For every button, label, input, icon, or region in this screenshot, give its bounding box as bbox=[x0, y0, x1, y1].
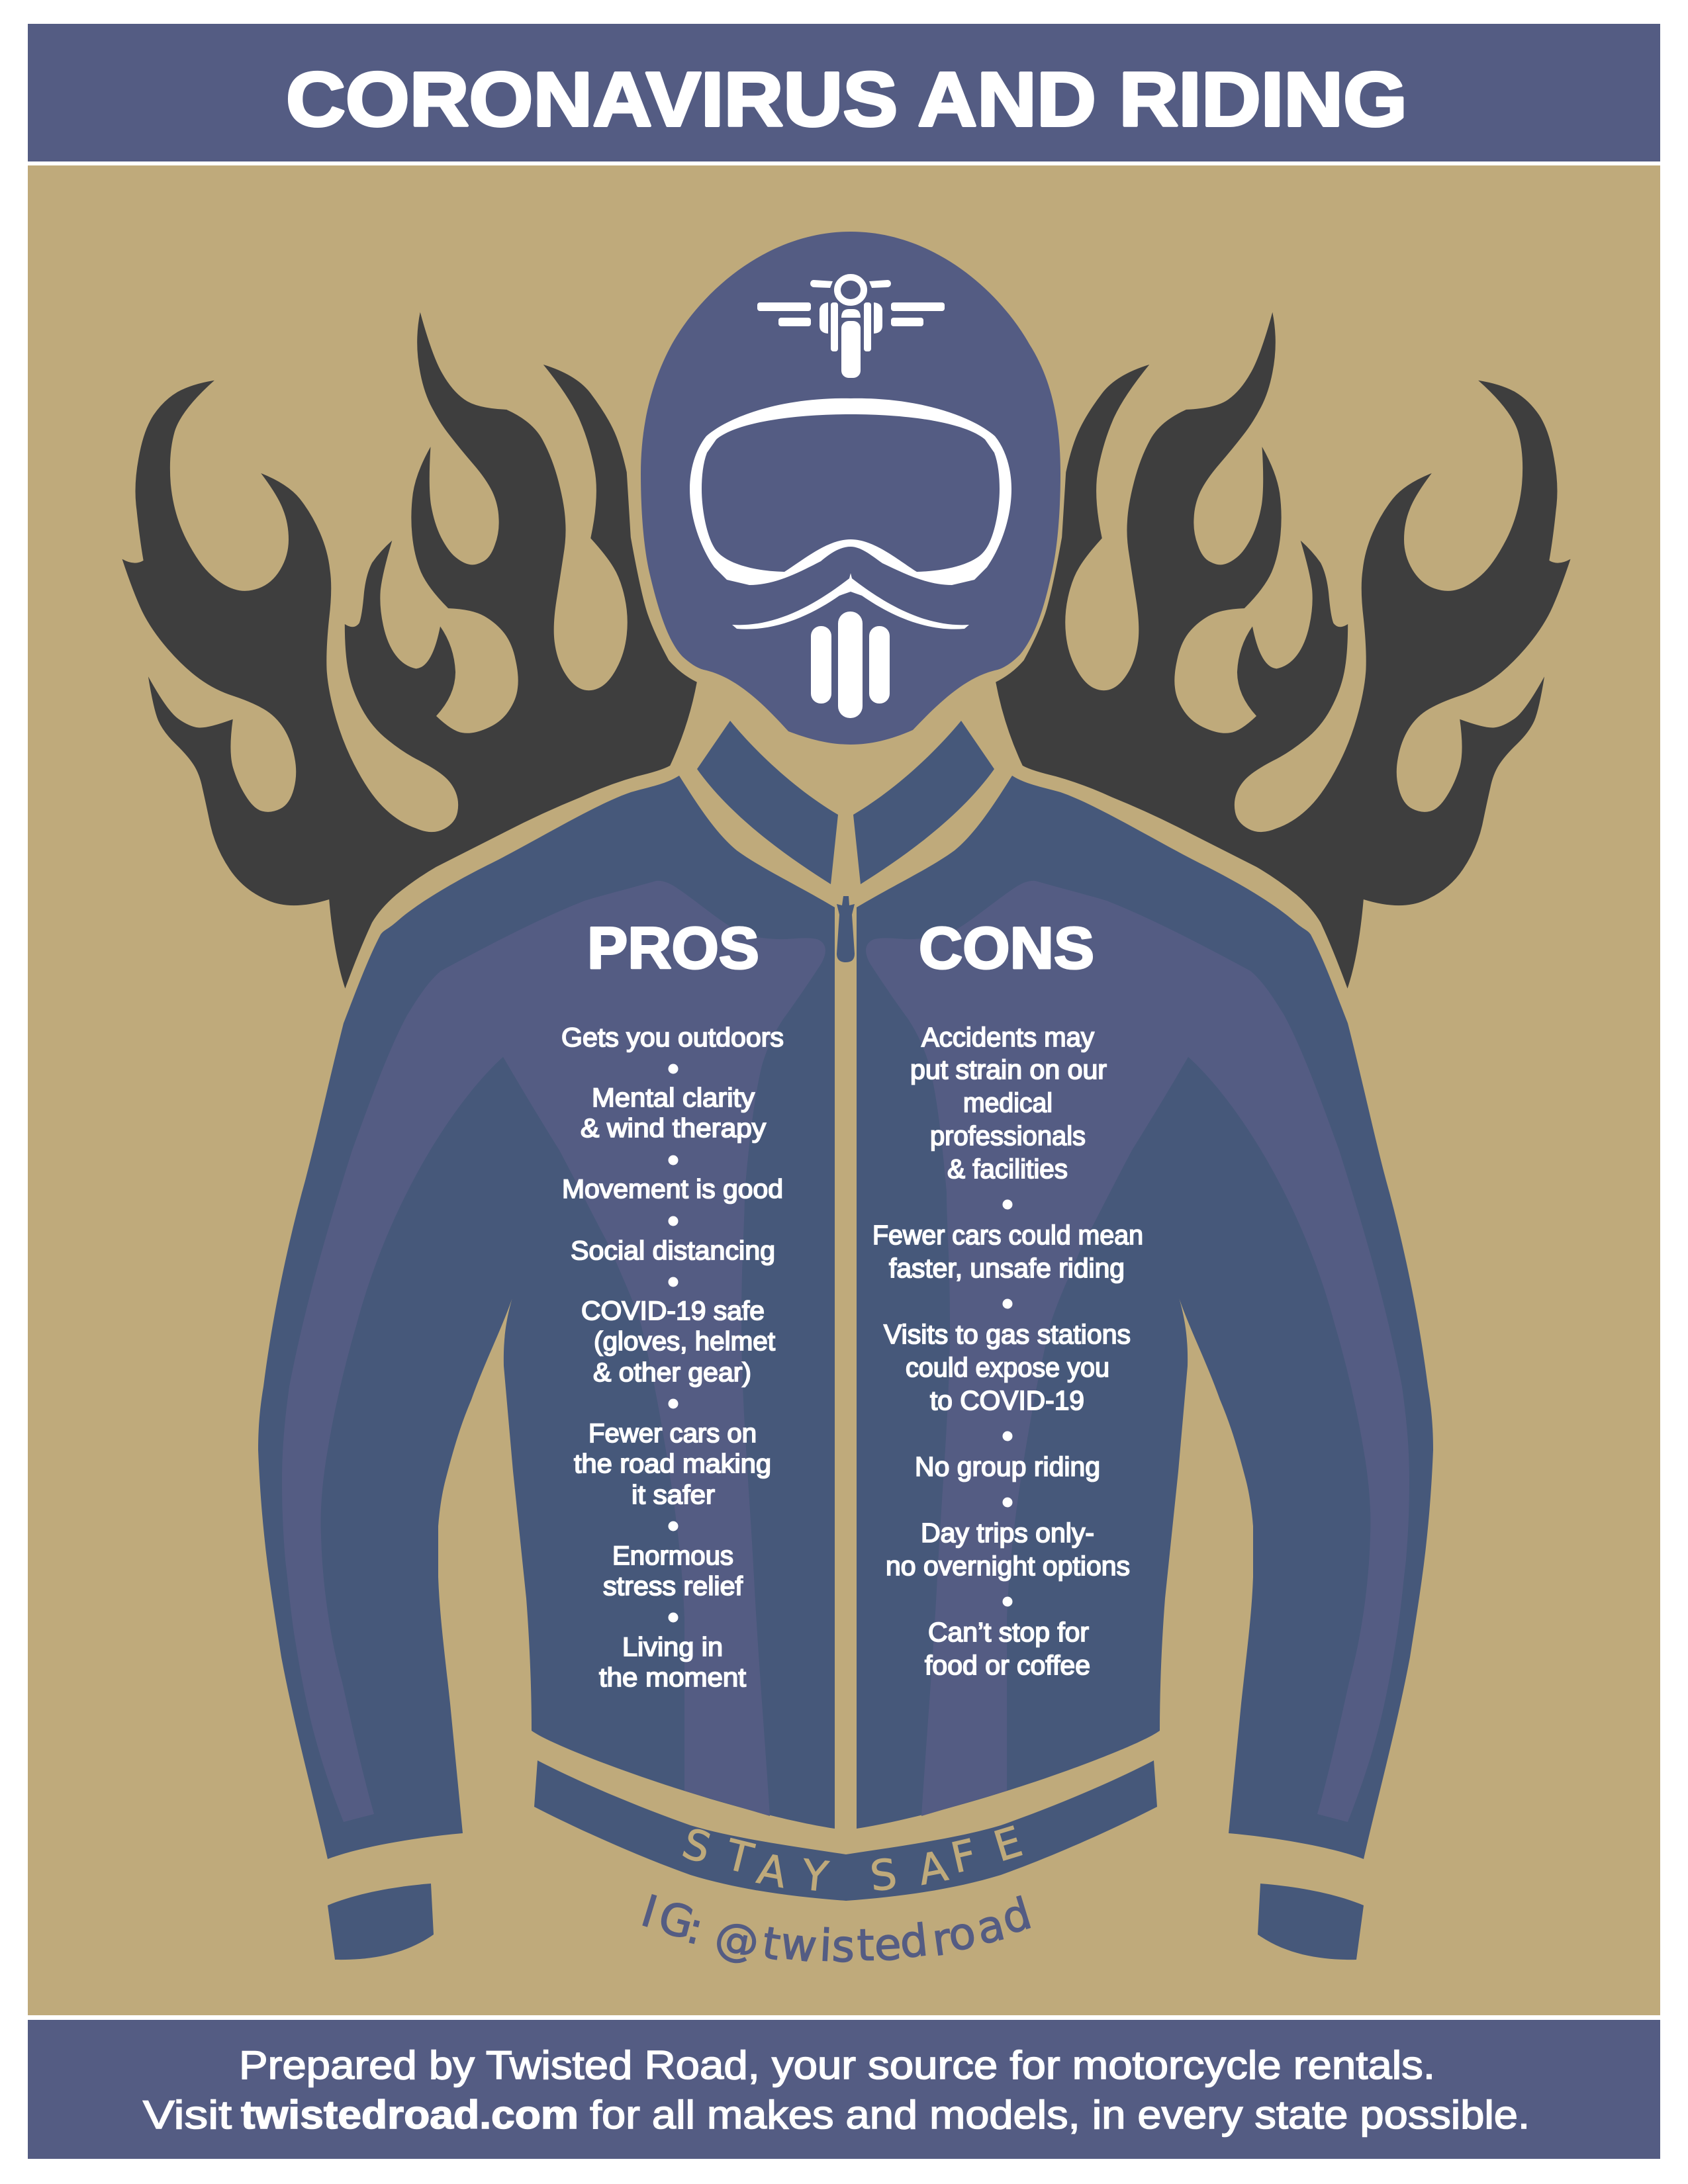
right purple stripe bbox=[866, 881, 1409, 1822]
cons heading: CONS bbox=[919, 915, 1094, 981]
footer line 2 bbox=[143, 2093, 1530, 2137]
pros list: & wind therapy bbox=[581, 1114, 766, 1143]
pros heading: PROS bbox=[587, 915, 759, 981]
cons list: Can’t stop for bbox=[928, 1617, 1089, 1647]
right cuff bbox=[1258, 1884, 1364, 1960]
cons list: & facilities bbox=[947, 1154, 1068, 1184]
cons list: Accidents may bbox=[921, 1022, 1094, 1052]
goggles bbox=[690, 398, 1011, 585]
pros list: it safer bbox=[632, 1480, 715, 1510]
cons list: faster, unsafe riding bbox=[889, 1253, 1125, 1283]
pros list: (gloves, helmet bbox=[594, 1327, 775, 1356]
mustache line bbox=[732, 573, 969, 629]
footer band bbox=[28, 2020, 1660, 2159]
cons list: medical bbox=[963, 1087, 1053, 1118]
cons list: put strain on our bbox=[910, 1054, 1107, 1085]
cons list: Fewer cars could mean bbox=[872, 1220, 1143, 1250]
cons column bbox=[872, 915, 1143, 1680]
jacket right panel bbox=[857, 776, 1433, 1859]
mouth vents bbox=[811, 612, 890, 718]
pros list: Fewer cars on bbox=[588, 1419, 757, 1448]
right collar bbox=[853, 721, 994, 884]
header: title band bbox=[28, 24, 1660, 161]
jacket left panel bbox=[258, 776, 835, 1859]
footer line 2: Visit bbox=[143, 2093, 232, 2137]
pros list bbox=[561, 1023, 784, 1692]
pros list: Movement is good bbox=[562, 1175, 783, 1204]
pros list: Mental clarity bbox=[592, 1083, 755, 1113]
icon: motorcycle bbox=[757, 277, 945, 378]
cons list: to COVID-19 bbox=[930, 1385, 1084, 1416]
helmet bbox=[641, 232, 1060, 745]
cons list: food or coffee bbox=[925, 1650, 1090, 1680]
pros list: & other gear) bbox=[593, 1358, 751, 1387]
left purple stripe bbox=[282, 881, 825, 1822]
pros list: Living in bbox=[622, 1633, 723, 1662]
left collar bbox=[697, 721, 838, 884]
cons list: No group riding bbox=[915, 1451, 1100, 1482]
stay safe lettering: STAY SAFE bbox=[677, 1817, 1027, 1903]
cons list: Day trips only- bbox=[921, 1518, 1094, 1548]
hem band bbox=[534, 1760, 1157, 1901]
cons list: no overnight options bbox=[886, 1551, 1130, 1581]
footer line 2: for all makes and models, in every state possible. bbox=[590, 2093, 1530, 2137]
left cuff bbox=[328, 1884, 434, 1960]
pros list: stress relief bbox=[603, 1572, 743, 1601]
jacket bbox=[258, 721, 1433, 1960]
footer line 2: twistedroad.com bbox=[241, 2093, 579, 2137]
pros list: the moment bbox=[599, 1663, 746, 1692]
cons list bbox=[872, 1022, 1143, 1680]
cons list: Visits to gas stations bbox=[884, 1319, 1131, 1349]
left flames bbox=[122, 312, 697, 989]
pros list: Social distancing bbox=[571, 1236, 775, 1265]
right flames bbox=[996, 312, 1570, 989]
cons list: could expose you bbox=[906, 1352, 1109, 1383]
zipper pull bbox=[837, 896, 855, 962]
pros list: Enormous bbox=[612, 1541, 733, 1570]
cons list: professionals bbox=[930, 1120, 1086, 1151]
footer line 1: Prepared by Twisted Road, your source for motorcycle rentals. bbox=[239, 2043, 1435, 2087]
pros list: the road making bbox=[574, 1449, 771, 1479]
instagram handle: IG: @twistedroad bbox=[635, 1886, 1037, 1972]
pros list: COVID-19 safe bbox=[581, 1297, 765, 1326]
title: CORONAVIRUS AND RIDING bbox=[286, 56, 1407, 142]
pros column bbox=[561, 915, 784, 1692]
pros list: Gets you outdoors bbox=[561, 1023, 784, 1052]
